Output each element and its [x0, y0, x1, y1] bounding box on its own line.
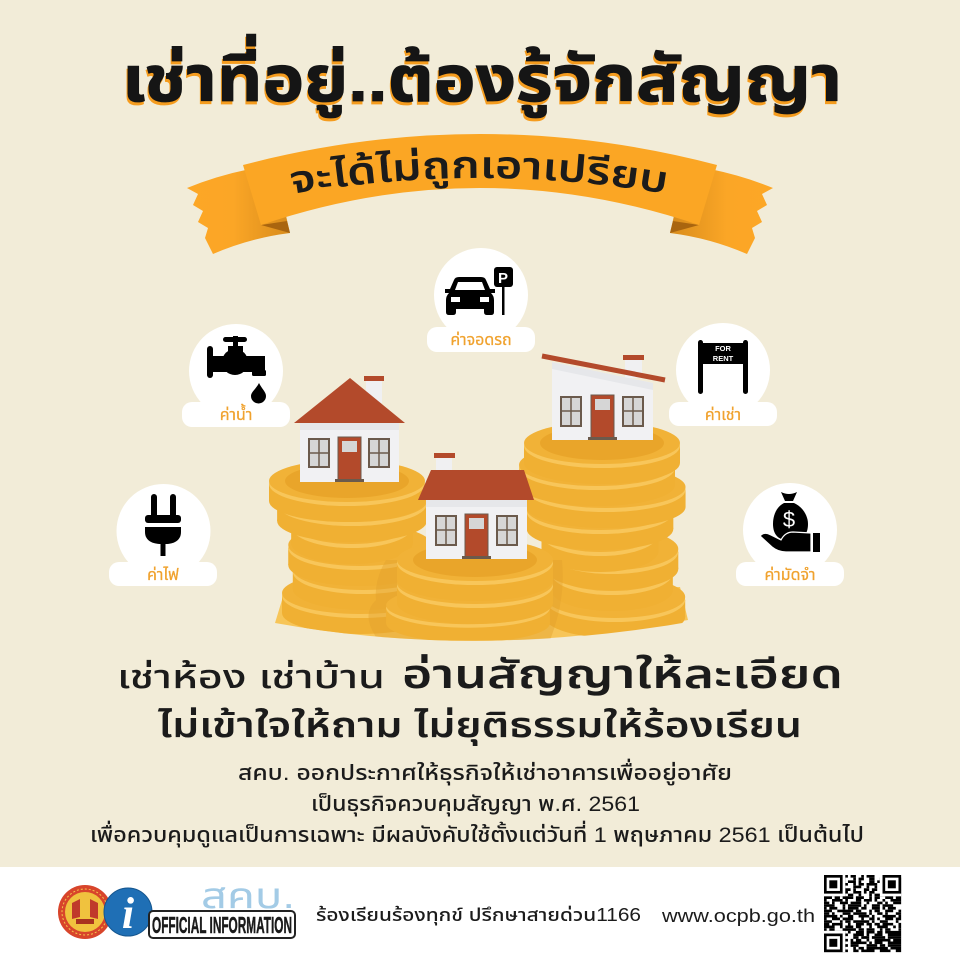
- house: left: [294, 376, 405, 482]
- shadow behind middle stack: [368, 560, 563, 640]
- logo: information i: i: [122, 889, 135, 938]
- QR code: [824, 875, 901, 952]
- logo: information i: [104, 888, 152, 938]
- headline text: อ่านสัญญาให้ละเอียด: [402, 652, 843, 697]
- middle stack: [386, 539, 553, 642]
- icon: for rent sign with label: [669, 323, 777, 426]
- icon: electric plug with label: ค่าไฟ: [147, 566, 179, 584]
- icon: car and parking sign with label: P: [498, 270, 508, 287]
- icon: for rent sign with label: FOR: [715, 344, 731, 353]
- headline text: [117, 652, 843, 746]
- logo: official information stamp: [149, 875, 295, 938]
- icon: car and parking sign with label: [427, 248, 535, 352]
- title: เช่าที่อยู่..ต้องรู้จักสัญญา: [121, 37, 841, 121]
- detail text: เพื่อควบคุมดูแลเป็นการเฉพาะ มีผลบังคับใช้ตั้งแต่วันที่ 1 พฤษภาคม 2561 เป็นต้นไป: [90, 820, 864, 848]
- house: right: [542, 355, 665, 440]
- logo: government seal: [58, 885, 112, 939]
- icon: car and parking sign with label: ค่าจอดรถ: [450, 331, 512, 349]
- hotline text: ร้องเรียนร้องทุกข์ ปรึกษาสายด่วน1166: [316, 905, 641, 926]
- coin stacks: [269, 422, 688, 642]
- icon: water tap with label: [182, 324, 290, 427]
- logo: official information stamp: สคบ.: [201, 875, 295, 916]
- logo: official information stamp: OFFICIAL INFORMATION: [152, 912, 292, 938]
- icon: money bag on hand with label: [736, 483, 844, 586]
- title: เช่าที่อยู่..ต้องรู้จักสัญญา: [122, 34, 842, 118]
- right stack: [519, 422, 686, 638]
- house: centre: [418, 453, 534, 559]
- ribbon banner: [187, 134, 773, 254]
- icon: electric plug with label: [109, 484, 217, 586]
- base shadow: [275, 587, 688, 641]
- icon: for rent sign with label: RENT: [713, 354, 734, 363]
- headline text: เช่าห้อง เช่าบ้าน: [117, 658, 385, 695]
- icon: money bag on hand with label: ค่ามัดจำ: [764, 566, 816, 584]
- icon: water tap with label: ค่าน้ำ: [220, 403, 252, 424]
- ribbon banner: จะได้ไม่ถูกเอาเปรียบ: [290, 148, 666, 193]
- footer band: [0, 867, 960, 960]
- website: www.ocpb.go.th: [661, 905, 815, 926]
- detail text: เป็นธุรกิจควบคุมสัญญา พ.ศ. 2561: [311, 793, 640, 817]
- headline text: ไม่เข้าใจให้ถาม ไม่ยุติธรรมให้ร้องเรียน: [157, 706, 802, 746]
- icon: for rent sign with label: ค่าเช่า: [705, 406, 741, 424]
- icon: money bag on hand with label: $: [783, 507, 795, 532]
- detail text: [90, 758, 864, 848]
- left stack: [269, 460, 438, 634]
- detail text: สคบ. ออกประกาศให้ธุรกิจให้เช่าอาคารเพื่ออยู่อาศัย: [238, 758, 732, 786]
